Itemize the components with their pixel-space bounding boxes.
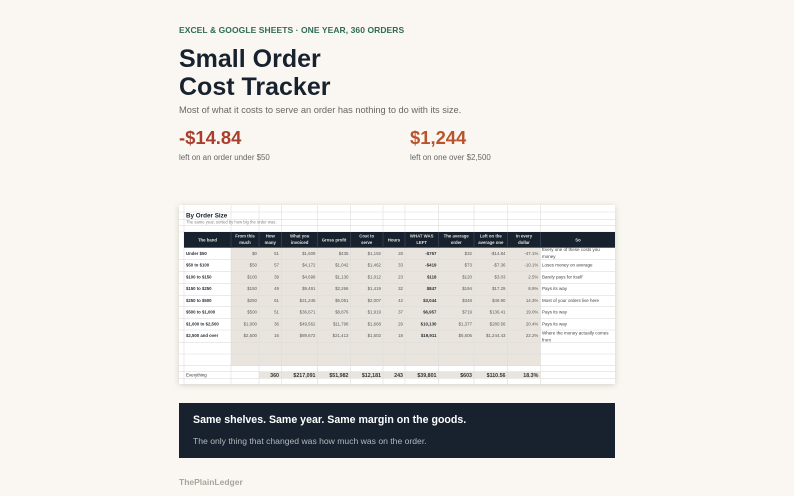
stat: large order profit (410, 126, 491, 162)
title (179, 45, 330, 100)
table header: invoiced (291, 240, 309, 245)
data cells: $21,245 (300, 298, 316, 303)
table header: many (265, 240, 277, 245)
stat value: $1,244 (410, 126, 466, 148)
So notes column (542, 247, 609, 342)
data cells: $17.29 (492, 286, 506, 291)
band labels: $100 to $150 (186, 274, 212, 279)
table header: How (266, 233, 275, 238)
sheet heading (186, 212, 277, 224)
data cells (244, 251, 538, 338)
table header: order (451, 240, 462, 245)
data cells: $3.03 (494, 274, 506, 279)
subtitle: Most of what it costs to serve an order has nothing to do with its size. (179, 105, 461, 115)
data cells: $50 (250, 263, 258, 268)
So notes column: money (542, 254, 556, 259)
data cells: $194 (462, 286, 473, 291)
data cells: 18 (398, 333, 404, 338)
data cells: 51 (274, 310, 280, 315)
totals row: $110.56 (487, 373, 506, 379)
stat value: -$14.84 (179, 126, 241, 148)
data cells: $150 (247, 286, 258, 291)
data cells: -$14.84 (491, 251, 506, 256)
data cells: 29 (398, 322, 404, 326)
data cells: $1,192 (368, 251, 382, 256)
data cells: 39 (274, 274, 280, 279)
table header: So (575, 237, 581, 242)
band labels (186, 251, 219, 338)
data cells: 32 (398, 286, 404, 291)
data cells: 8.9% (528, 286, 538, 291)
table header: Cost to (359, 233, 374, 238)
data cells: 28 (398, 251, 404, 256)
table header: WHAT WAS (410, 233, 434, 238)
data cells: -$7.36 (493, 263, 506, 268)
band labels: $2,500 and over (186, 333, 219, 338)
data cells: $1,000 (244, 322, 258, 326)
table header: The average (444, 233, 469, 238)
data cells: 33 (398, 263, 404, 268)
totals row: 360 (270, 373, 279, 379)
data cells: $36,671 (300, 310, 316, 315)
table header: dollar (518, 240, 530, 245)
data cells: $21,413 (333, 333, 349, 338)
callout body: The only thing that changed was how much was on the order. (193, 436, 427, 446)
data cells: $6,957 (423, 310, 437, 315)
data cells: $1,244.43 (486, 333, 506, 338)
totals row (186, 373, 539, 379)
data cells: $348 (462, 298, 473, 303)
table header: From this (235, 233, 255, 238)
totals row: $39,801 (417, 373, 437, 379)
title: Cost Tracker (179, 72, 330, 100)
data cells: $4,172 (302, 263, 316, 268)
So notes column: Most of your orders live here (542, 298, 600, 303)
data cells: $2,266 (335, 286, 349, 291)
data cells: $0 (252, 251, 258, 256)
data cells: $19,911 (421, 333, 437, 338)
data cells: $8,876 (335, 310, 349, 315)
band labels: Under $50 (186, 251, 207, 256)
stat: small order loss (179, 126, 270, 162)
data cells: $10,130 (421, 322, 437, 326)
data cells: 49 (274, 286, 280, 291)
data cells: $11,798 (333, 322, 349, 326)
band labels: $250 to $500 (186, 298, 212, 303)
totals row: 18.3% (523, 373, 539, 379)
kicker: EXCEL & GOOGLE SHEETS · ONE YEAR, 360 ORDERS (179, 25, 404, 35)
callout headline: Same shelves. Same year. Same margin on the goods. (193, 414, 466, 426)
data cells: $4,698 (302, 274, 316, 279)
data cells: $100 (247, 274, 258, 279)
data cells: $2,500 (244, 333, 258, 338)
data cells: $1,919 (368, 310, 382, 315)
band labels: $500 to $1,000 (186, 310, 216, 315)
data cells: $1,609 (302, 251, 316, 256)
callout banner (179, 403, 615, 458)
data cells: $2,007 (368, 298, 382, 303)
table header: The band (198, 237, 217, 242)
data cells: $49.90 (492, 298, 506, 303)
totals row: 243 (394, 373, 403, 379)
band labels: $50 to $100 (186, 263, 210, 268)
totals row: $603 (460, 373, 472, 379)
data cells: 51 (274, 251, 280, 256)
So notes column: Every one of these costs you (542, 247, 600, 252)
title: Small Order (179, 45, 321, 73)
totals row: Everything (186, 373, 207, 378)
sheet heading: By Order Size (186, 212, 228, 220)
So notes column: from (542, 338, 551, 342)
stat caption: left on an order under $50 (179, 152, 270, 162)
data cells: $250 (247, 298, 258, 303)
data cells: $32 (465, 251, 473, 256)
data cells: 61 (274, 298, 280, 303)
totals row: $51,982 (329, 373, 349, 379)
brand footer: ThePlainLedger (179, 476, 243, 486)
data cells: 2.5% (528, 274, 538, 279)
data cells: 57 (274, 263, 280, 268)
table header: What you (290, 233, 310, 238)
data cells: $1,130 (335, 274, 349, 279)
data cells: -$757 (425, 251, 437, 256)
data cells: 23 (398, 274, 404, 279)
data cells: $120 (462, 274, 473, 279)
spreadsheet panel (179, 205, 615, 384)
table header: In every (516, 233, 533, 238)
table header: Left on the (480, 233, 502, 238)
data cells: 42 (398, 298, 404, 303)
data cells: 14.3% (526, 298, 538, 303)
table header: LEFT (416, 240, 427, 245)
data cells: -$419 (425, 263, 437, 268)
data cells: $5,051 (335, 298, 349, 303)
data cells: $5,605 (459, 333, 473, 338)
data cells: $118 (427, 274, 437, 279)
So notes column: Loses money on average (542, 263, 593, 268)
table header: Hours (388, 237, 401, 242)
data cells: $73 (465, 263, 473, 268)
data cells: 19.0% (526, 310, 538, 315)
data cells: $136.41 (490, 310, 506, 315)
totals row: $217,091 (293, 373, 316, 379)
data cells: $1,462 (368, 263, 382, 268)
data cells: $49,562 (300, 322, 316, 326)
band labels: $1,000 to $2,500 (186, 322, 219, 326)
data cells: -47.1% (524, 251, 538, 256)
data cells: -10.1% (524, 263, 538, 268)
data cells: $500 (247, 310, 258, 315)
So notes column: Pays its way (542, 310, 568, 315)
stat caption: left on one over $2,500 (410, 152, 491, 162)
data cells: 37 (398, 310, 404, 315)
data cells: $847 (427, 286, 437, 291)
data cells: $280.56 (490, 322, 506, 326)
data cells: $719 (462, 310, 473, 315)
data cells: $1,042 (335, 263, 349, 268)
data cells: $3,044 (423, 298, 437, 303)
So notes column: Pays its way (542, 322, 568, 326)
sheet heading: The same year, sorted by how big the order was. (186, 220, 277, 224)
data cells: $89,672 (300, 333, 316, 338)
table header: much (239, 240, 251, 245)
data cells: $1,012 (368, 274, 382, 279)
data cells: 22.2% (526, 333, 538, 338)
data cells: 20.4% (526, 322, 538, 326)
table header: serve (361, 240, 373, 245)
So notes column: Barely pays for itself (542, 274, 583, 280)
table header (184, 232, 615, 248)
data cells: 16 (274, 333, 280, 338)
data cells: $435 (339, 251, 349, 256)
data cells: 36 (274, 322, 280, 326)
data cells: $1,419 (368, 286, 382, 291)
totals row: $12,181 (362, 373, 381, 379)
So notes column: Pays its way (542, 286, 568, 291)
data cells: $1,502 (368, 333, 382, 338)
table header: average one (478, 240, 504, 245)
data cells: $9,491 (302, 286, 316, 291)
So notes column: Where the money actually comes (542, 331, 609, 336)
band labels: $150 to $250 (186, 286, 212, 291)
data cells: $1,377 (459, 322, 473, 326)
table header: Gross profit (322, 237, 347, 242)
data cells: $1,668 (368, 322, 382, 326)
